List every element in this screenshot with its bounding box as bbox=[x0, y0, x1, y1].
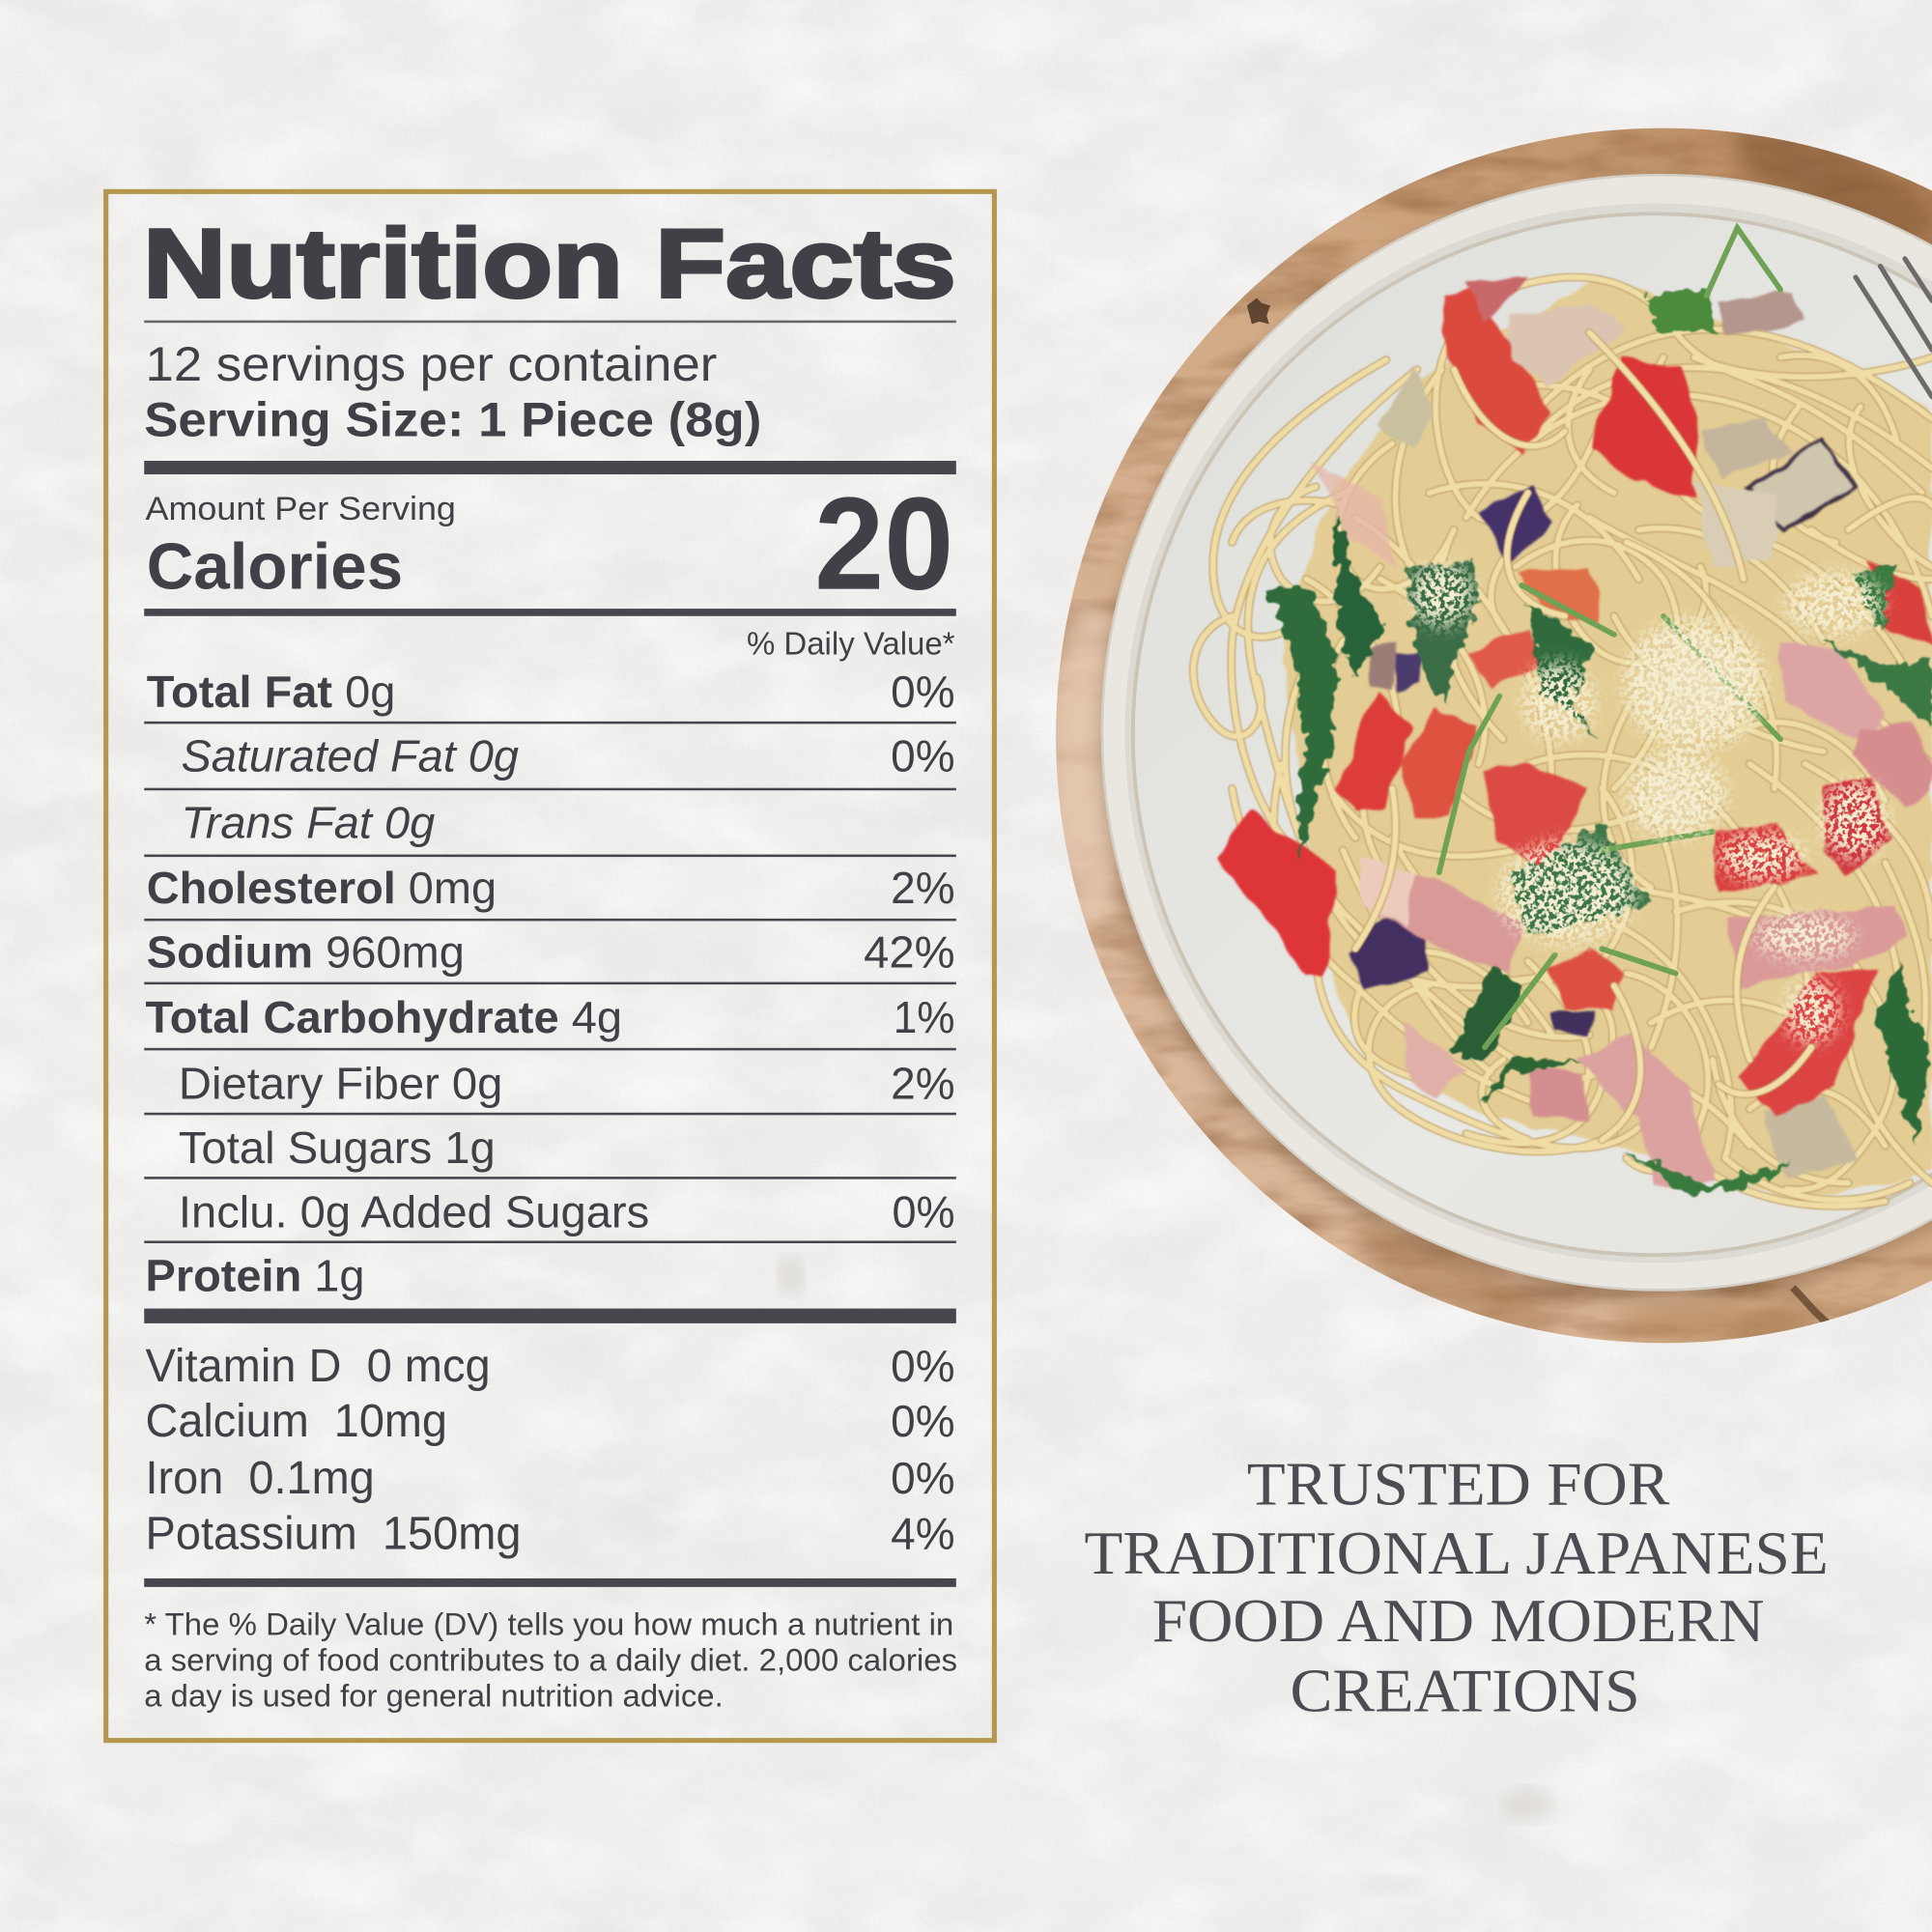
row: added sugars: Inclu. 0g Added Sugars bbox=[179, 1186, 649, 1236]
calories block: Calories bbox=[147, 531, 403, 604]
tagline: CREATIONS bbox=[1290, 1657, 1640, 1725]
row: sodium: 42% bbox=[864, 926, 955, 977]
tagline: TRUSTED FOR bbox=[1247, 1449, 1670, 1518]
stems bbox=[1439, 228, 1780, 1047]
row: dietary fiber: 2% bbox=[891, 1059, 955, 1109]
footnote: a day is used for general nutrition advice. bbox=[144, 1679, 724, 1714]
fork bbox=[1856, 259, 1932, 397]
pasta base bbox=[1282, 277, 1932, 1202]
row: total fat: Total Fat 0g bbox=[147, 667, 395, 717]
row: potassium: 4% bbox=[891, 1508, 955, 1558]
row: sodium: Sodium 960mg bbox=[147, 926, 465, 977]
serving information: Serving Size: 1 Piece (8g) bbox=[144, 393, 761, 447]
row: total sugars: Total Sugars 1g bbox=[179, 1122, 496, 1173]
green leaves and stems bbox=[1266, 228, 1932, 1195]
leaves bbox=[1266, 290, 1932, 1195]
row: saturated fat bbox=[182, 730, 955, 781]
grated parmesan bbox=[1409, 562, 1889, 1042]
row: saturated fat: Saturated Fat 0g bbox=[182, 730, 519, 781]
row: added sugars: 0% bbox=[892, 1186, 955, 1236]
row: potassium: Potassium 150mg bbox=[146, 1507, 522, 1559]
nutrient rows bbox=[146, 667, 955, 1301]
panel border bbox=[106, 191, 994, 1741]
row: total carbohydrate: 1% bbox=[894, 992, 955, 1042]
footnote: a serving of food contributes to a daily diet. 2,000 calories bbox=[144, 1643, 957, 1678]
overlapping strands bbox=[1355, 332, 1932, 1140]
spaghetti bbox=[1193, 277, 1932, 1206]
photo: pasta plate on wooden board bbox=[1047, 104, 1932, 1357]
serving information: 12 servings per container bbox=[146, 337, 717, 391]
pasta strands bbox=[1193, 277, 1932, 1206]
row: dietary fiber bbox=[179, 1059, 955, 1109]
row: trans fat: Trans Fat 0g bbox=[182, 797, 436, 847]
row: total carbohydrate: Total Carbohydrate 4g bbox=[146, 992, 622, 1042]
calories block bbox=[146, 469, 953, 617]
tagline bbox=[1084, 1449, 1829, 1725]
eggplant pieces bbox=[1350, 294, 1858, 1180]
serving information bbox=[144, 337, 761, 447]
row: cholesterol bbox=[147, 863, 955, 913]
tomato pieces bbox=[1216, 277, 1932, 1115]
plate shadow bbox=[1100, 186, 1932, 1300]
row: total carbohydrate bbox=[146, 992, 955, 1042]
tagline: TRADITIONAL JAPANESE bbox=[1084, 1519, 1829, 1587]
footnote bbox=[144, 1607, 957, 1714]
row: potassium bbox=[146, 1507, 955, 1559]
row: protein: Protein 1g bbox=[146, 1251, 365, 1301]
ceramic plate bbox=[1102, 175, 1932, 1290]
panel: nutrition facts label bbox=[106, 191, 994, 1741]
row: iron: 0% bbox=[891, 1453, 955, 1503]
row: calcium: 0% bbox=[891, 1396, 955, 1446]
row: calcium bbox=[146, 1395, 955, 1447]
row: cholesterol: 2% bbox=[891, 863, 955, 913]
calories block: Amount Per Serving bbox=[146, 491, 456, 527]
row: iron: Iron 0.1mg bbox=[146, 1452, 375, 1504]
row: total fat: 0% bbox=[891, 667, 955, 717]
row: vitamin d bbox=[146, 1340, 955, 1392]
wooden board bbox=[1047, 104, 1932, 1357]
row: vitamin d: 0% bbox=[891, 1341, 955, 1391]
divider rules bbox=[144, 321, 956, 1587]
row: iron bbox=[146, 1452, 955, 1504]
ham pieces bbox=[1312, 462, 1932, 1185]
row: saturated fat: 0% bbox=[891, 730, 955, 781]
vitamins and minerals bbox=[146, 1340, 955, 1559]
row: sodium bbox=[147, 926, 955, 977]
tagline: FOOD AND MODERN bbox=[1152, 1586, 1765, 1655]
footnote: * The % Daily Value (DV) tells you how much a nutrient in bbox=[144, 1607, 953, 1642]
row: vitamin d: Vitamin D 0 mcg bbox=[146, 1340, 491, 1392]
row: dietary fiber: Dietary Fiber 0g bbox=[179, 1059, 502, 1109]
row: cholesterol: Cholesterol 0mg bbox=[147, 863, 497, 913]
row: total fat bbox=[147, 667, 955, 717]
calories block: 20 bbox=[814, 469, 953, 617]
title: Nutrition Facts bbox=[143, 210, 956, 318]
daily value header: % Daily Value* bbox=[747, 626, 955, 662]
row: added sugars bbox=[179, 1186, 955, 1236]
row: calcium: Calcium 10mg bbox=[146, 1395, 447, 1447]
